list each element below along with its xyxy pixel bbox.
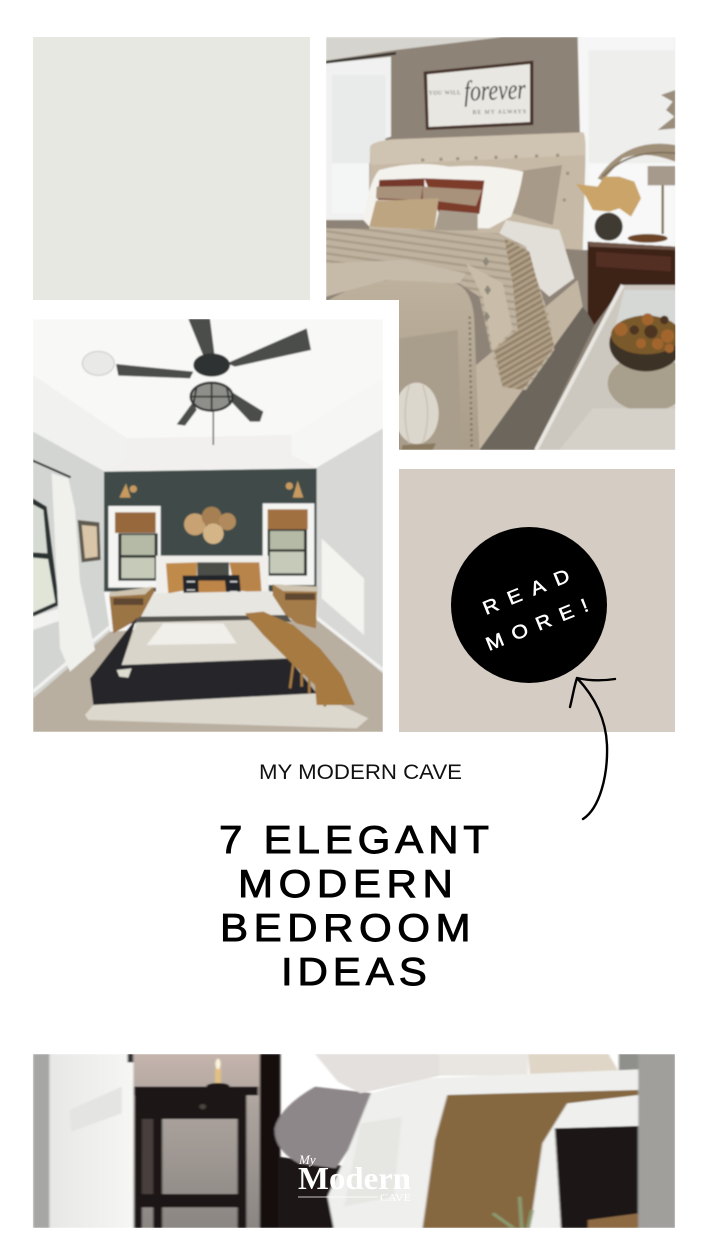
panel: white frame behind left photo [33, 300, 399, 732]
carpet [479, 307, 595, 450]
logo [298, 1152, 411, 1204]
throw blanket [326, 228, 554, 390]
side rail [474, 280, 583, 450]
read more badge: MORE! [483, 595, 591, 655]
arrow pointing to badge [570, 678, 615, 819]
bowl of acorns [609, 313, 683, 371]
nightstands [109, 584, 317, 633]
accent wall [104, 468, 317, 592]
nightstand, vase and lamp [576, 144, 675, 325]
bed and blankets [85, 591, 368, 728]
marble coffee table [536, 285, 688, 450]
title: IDEAS [281, 949, 427, 994]
title [219, 817, 489, 994]
wall sign: forever [463, 74, 527, 108]
headboard [369, 132, 585, 250]
dark bench [555, 1126, 638, 1228]
wall sign: YOU WILL [429, 90, 461, 97]
logo: Modern [298, 1160, 411, 1196]
logo: My [298, 1152, 316, 1167]
ceiling vent [82, 351, 114, 375]
wall sign [424, 61, 533, 130]
woven wall baskets [184, 507, 236, 544]
nightstand [134, 1087, 258, 1228]
photo: dark nightstand and white bed banner [33, 1054, 675, 1228]
title: 7 ELEGANT [219, 817, 489, 862]
title: MODERN [238, 861, 453, 906]
panel: pale grey colour block [33, 37, 310, 300]
photo: beige tufted bed with marble table [326, 37, 688, 450]
ceiling fan [116, 319, 311, 445]
white pumpkin [395, 383, 439, 450]
brown throw [423, 1090, 638, 1228]
candle [206, 1059, 230, 1089]
left wall window, curtain and art [33, 461, 101, 672]
read more badge: READ [480, 566, 573, 619]
headboard and pillows [154, 554, 270, 594]
wall sign: BE MY ALWAYS [473, 109, 526, 116]
windows on accent wall [108, 503, 314, 588]
white duvet [328, 1069, 638, 1228]
photo: bedroom with dark accent wall and ceiling fan [33, 319, 383, 732]
logo: CAVE [380, 1193, 411, 1204]
read more badge [451, 527, 607, 683]
panel: beige colour block [399, 469, 675, 732]
grey sheet [275, 1087, 373, 1168]
pillows [315, 1054, 639, 1093]
sconces [119, 481, 303, 498]
sleigh footboard [326, 278, 479, 450]
door [33, 1054, 133, 1228]
pillows [363, 164, 562, 231]
title: BEDROOM [220, 905, 471, 950]
brand line: MY MODERN CAVE [259, 761, 462, 784]
